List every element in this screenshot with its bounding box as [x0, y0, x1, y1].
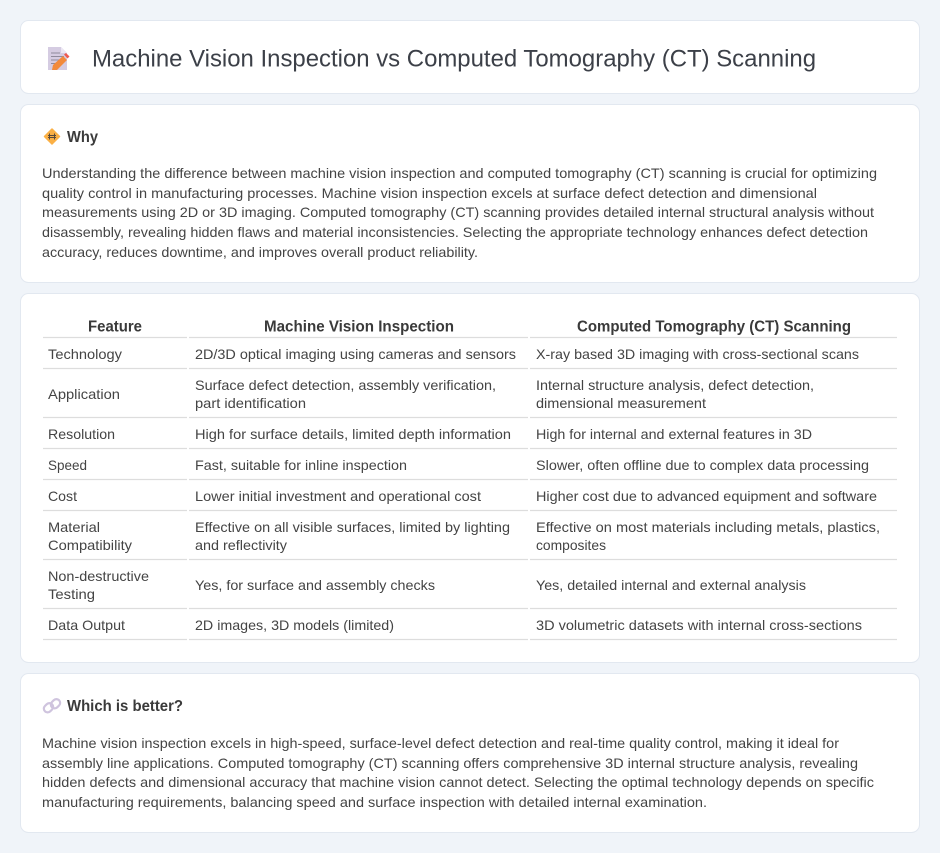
row: data output: [48, 617, 862, 633]
row: data output: 3D volumetric datasets with internal cross-sections: [536, 617, 862, 633]
row: speed: Slower, often offline due to complex data processing: [536, 457, 869, 473]
row: speed: [48, 457, 869, 473]
text block: why: Understanding the difference between machine vision inspection and computed tomography (CT) scanning is crucial for optimizing: [42, 165, 877, 181]
table header: [88, 318, 851, 336]
row: application: dimensional measurement: [536, 395, 706, 411]
row: technology: Technology: [48, 346, 122, 362]
row: data output: Data Output: [48, 617, 125, 633]
row: application: part identification: [195, 395, 306, 411]
row: speed: Speed: [48, 457, 87, 473]
row: application: Internal structure analysis, defect detection,: [536, 377, 814, 393]
row: technology: 2D/3D optical imaging using cameras and sensors: [195, 346, 516, 362]
row: cost: Cost: [48, 488, 77, 504]
text block: why: measurements using 2D or 3D imaging. Computed tomography (CT) scanning provides detailed internal structural analysis without: [42, 204, 874, 220]
row: resolution: [48, 426, 812, 442]
header panel: [20, 20, 920, 94]
text block: which is better: hidden defects and dimensional accuracy that machine vision cannot detect. Selecting the optimal technology depends on specific: [42, 774, 874, 790]
icon: document with pencil: [48, 47, 70, 70]
row: application: Application: [48, 386, 120, 402]
text block: why: quality control in manufacturing processes. Machine vision inspection excels at surface defect detection and dimensional: [42, 185, 817, 201]
text block: which is better: assembly line applications. Computed tomography (CT) scanning offers comprehensive 3D internal structure analysis, revealing: [42, 755, 858, 771]
row: non-destructive testing: Yes, for surface and assembly checks: [195, 577, 435, 593]
text block: why: [42, 165, 877, 260]
row: material compatibility: Compatibility: [48, 537, 132, 553]
row: material compatibility: Effective on most materials including metals, plastics,: [536, 519, 880, 535]
text block: why: accuracy, reduces downtime, and improves overall product reliability.: [42, 244, 478, 260]
table header: Feature: [88, 318, 142, 336]
panel: comparison table: [20, 294, 920, 662]
row: technology: X-ray based 3D imaging with cross-sectional scans: [536, 346, 859, 362]
table header: Computed Tomography (CT) Scanning: [577, 318, 851, 336]
row: application: Surface defect detection, assembly verification,: [195, 377, 496, 393]
row: cost: Higher cost due to advanced equipment and software: [536, 488, 877, 504]
row: cost: [48, 488, 877, 504]
row: non-destructive testing: Non-destructive: [48, 568, 149, 584]
row: resolution: High for surface details, limited depth information: [195, 426, 511, 442]
row: material compatibility: composites: [536, 537, 606, 553]
row: application: [48, 377, 814, 411]
title: Machine Vision Inspection vs Computed Tomography (CT) Scanning: [92, 46, 816, 72]
row: material compatibility: Material: [48, 519, 100, 535]
row: resolution: High for internal and external features in 3D: [536, 426, 812, 442]
row: material compatibility: and reflectivity: [195, 537, 287, 553]
icon: chain link: [42, 698, 62, 714]
icon: warning diamond: [44, 129, 60, 144]
text block: which is better: Machine vision inspection excels in high-speed, surface-level defect detection and real-time quality control, making it ideal for: [42, 735, 839, 751]
row: non-destructive testing: Yes, detailed internal and external analysis: [536, 577, 806, 593]
text block: which is better: manufacturing requirements, balancing speed and surface inspection with detailed internal examination.: [42, 794, 707, 810]
row: non-destructive testing: [48, 568, 806, 602]
table header: Machine Vision Inspection: [264, 318, 454, 336]
row: resolution: Resolution: [48, 426, 115, 442]
row: cost: Lower initial investment and operational cost: [195, 488, 481, 504]
row: data output: 2D images, 3D models (limited): [195, 617, 394, 633]
row: material compatibility: Effective on all visible surfaces, limited by lighting: [195, 519, 510, 535]
row: material compatibility: [48, 519, 880, 553]
row: technology: [48, 346, 859, 362]
heading: which is better: Which is better?: [67, 698, 183, 715]
text block: which is better: [42, 735, 874, 810]
panel: which is better: [20, 674, 920, 832]
heading: why: Why: [67, 129, 98, 146]
row: speed: Fast, suitable for inline inspection: [195, 457, 407, 473]
row: non-destructive testing: Testing: [48, 586, 95, 602]
panel: why: [20, 104, 920, 282]
text block: why: disassembly, revealing hidden flaws and material inconsistencies. Selecting the appropriate technology enhances defect detection: [42, 224, 868, 240]
